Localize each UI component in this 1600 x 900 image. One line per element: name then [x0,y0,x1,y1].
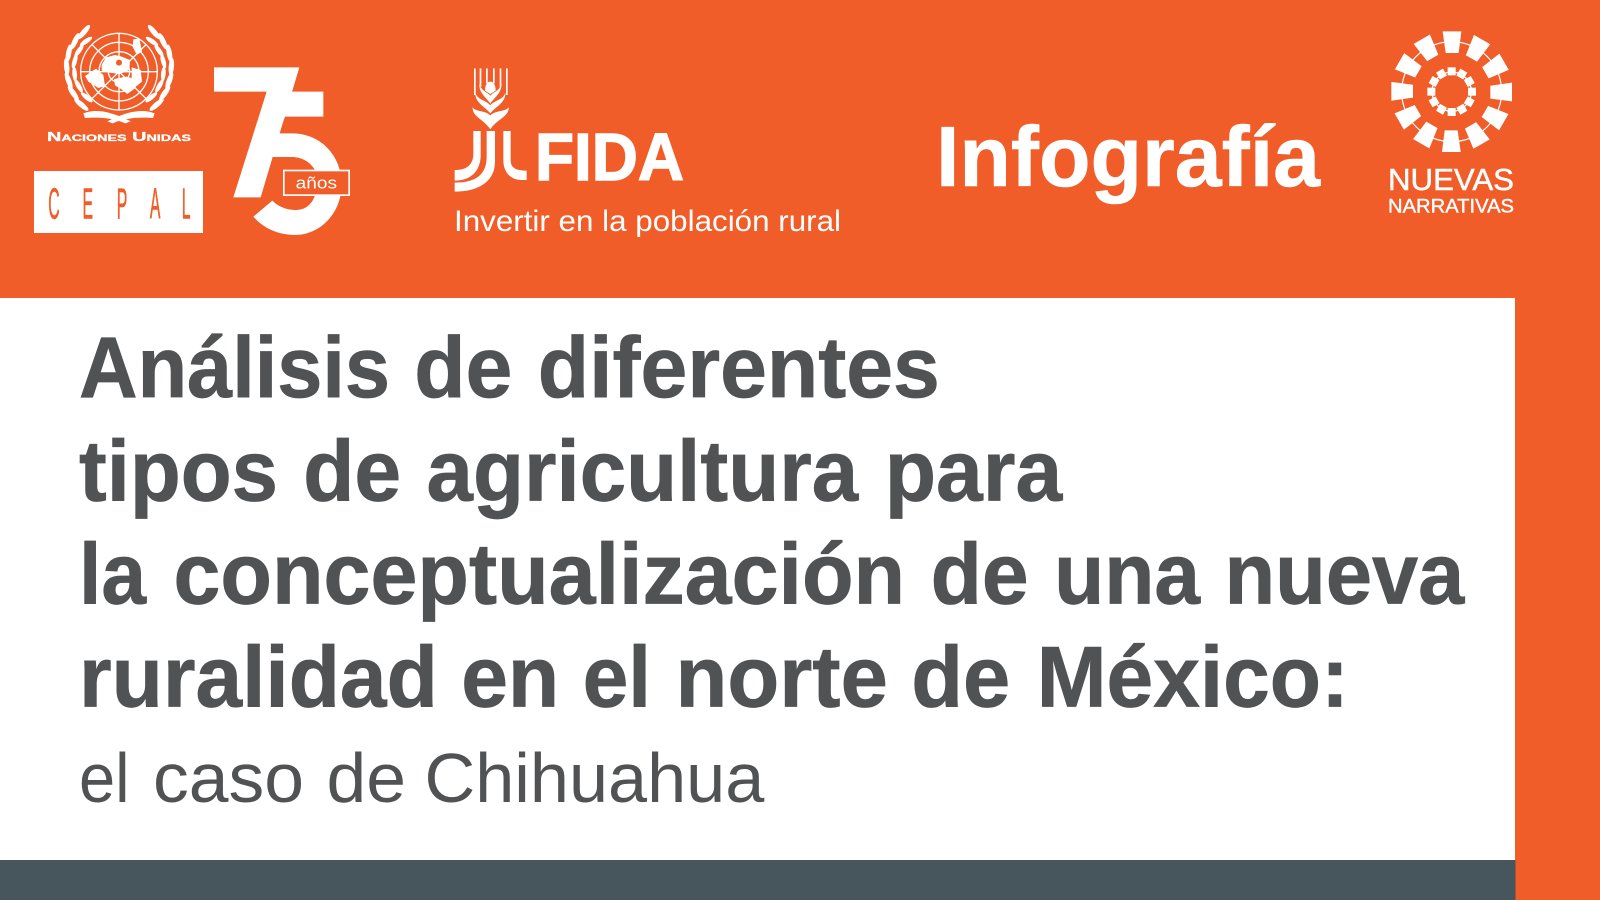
title line 4: en [461,630,559,726]
title line 2: para [885,424,1063,520]
subtitle [79,739,764,817]
title line 4: ruralidad [79,630,438,726]
title line 3: una [1054,526,1201,622]
icon: JJL strokes [455,131,527,192]
title line 4: el [583,630,651,726]
icon: wheat ear [473,68,509,129]
title line 1 [79,320,940,416]
logo: CEPAL box: CEPAL [48,180,191,229]
logo: United Nations emblem [63,23,175,123]
subtitle: de [326,739,406,817]
subtitle: caso [153,739,304,817]
logo: FIDA wheat and JJL symbol [455,68,527,192]
panel: dark footer bar [0,860,1516,900]
title line 2: de [303,424,401,520]
title line 3: de [931,526,1029,622]
text: Naciones Unidas: Naciones Unidas [47,130,191,144]
title line 4 [79,630,1349,726]
panel: white title panel [0,298,1515,860]
title line 3: la [79,526,147,622]
logo: CEPAL box [34,171,203,233]
logo: Nuevas Narrativas wheel [1392,32,1512,152]
title line 1: de [414,320,512,416]
subtitle: Chihuahua [424,739,764,817]
title line 3: nueva [1224,526,1465,622]
title line 2: tipos [79,424,278,520]
text: FIDA wordmark: FIDA [535,120,684,195]
title line 3: conceptualización [174,526,905,622]
title [79,320,1465,726]
logo: 75 años [214,67,349,235]
title line 3 [79,526,1465,622]
title line 4: México: [1037,630,1349,726]
title line 2: agricultura [426,424,859,520]
title line 2 [79,424,1063,520]
title line 4: de [911,630,1010,726]
subtitle: el [79,739,130,817]
text: FIDA tagline: Invertir en la población rural [454,205,841,238]
text: NARRATIVAS: NARRATIVAS [1388,196,1514,218]
text: NUEVAS: NUEVAS [1388,162,1514,197]
logo: 75 años: años [296,175,337,193]
title line 4: norte [676,630,888,726]
title line 1: diferentes [538,320,940,416]
heading: Infografía: Infografía [936,110,1321,205]
title line 1: Análisis [79,320,390,416]
